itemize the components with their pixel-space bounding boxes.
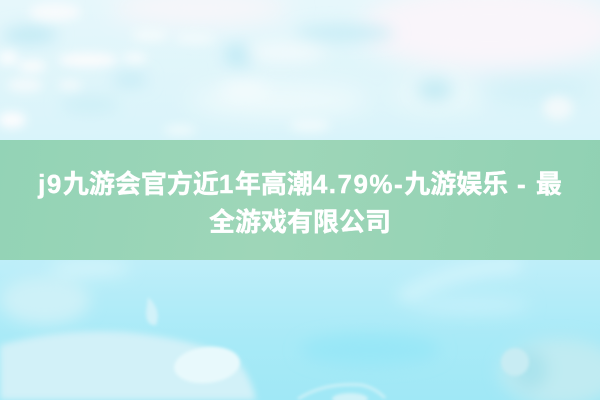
title band xyxy=(0,140,600,260)
title xyxy=(38,169,562,237)
title: j9九游会官方近1年高潮4.79%-九游娱乐 - 最 xyxy=(38,169,562,199)
title: 全游戏有限公司 xyxy=(209,207,391,237)
